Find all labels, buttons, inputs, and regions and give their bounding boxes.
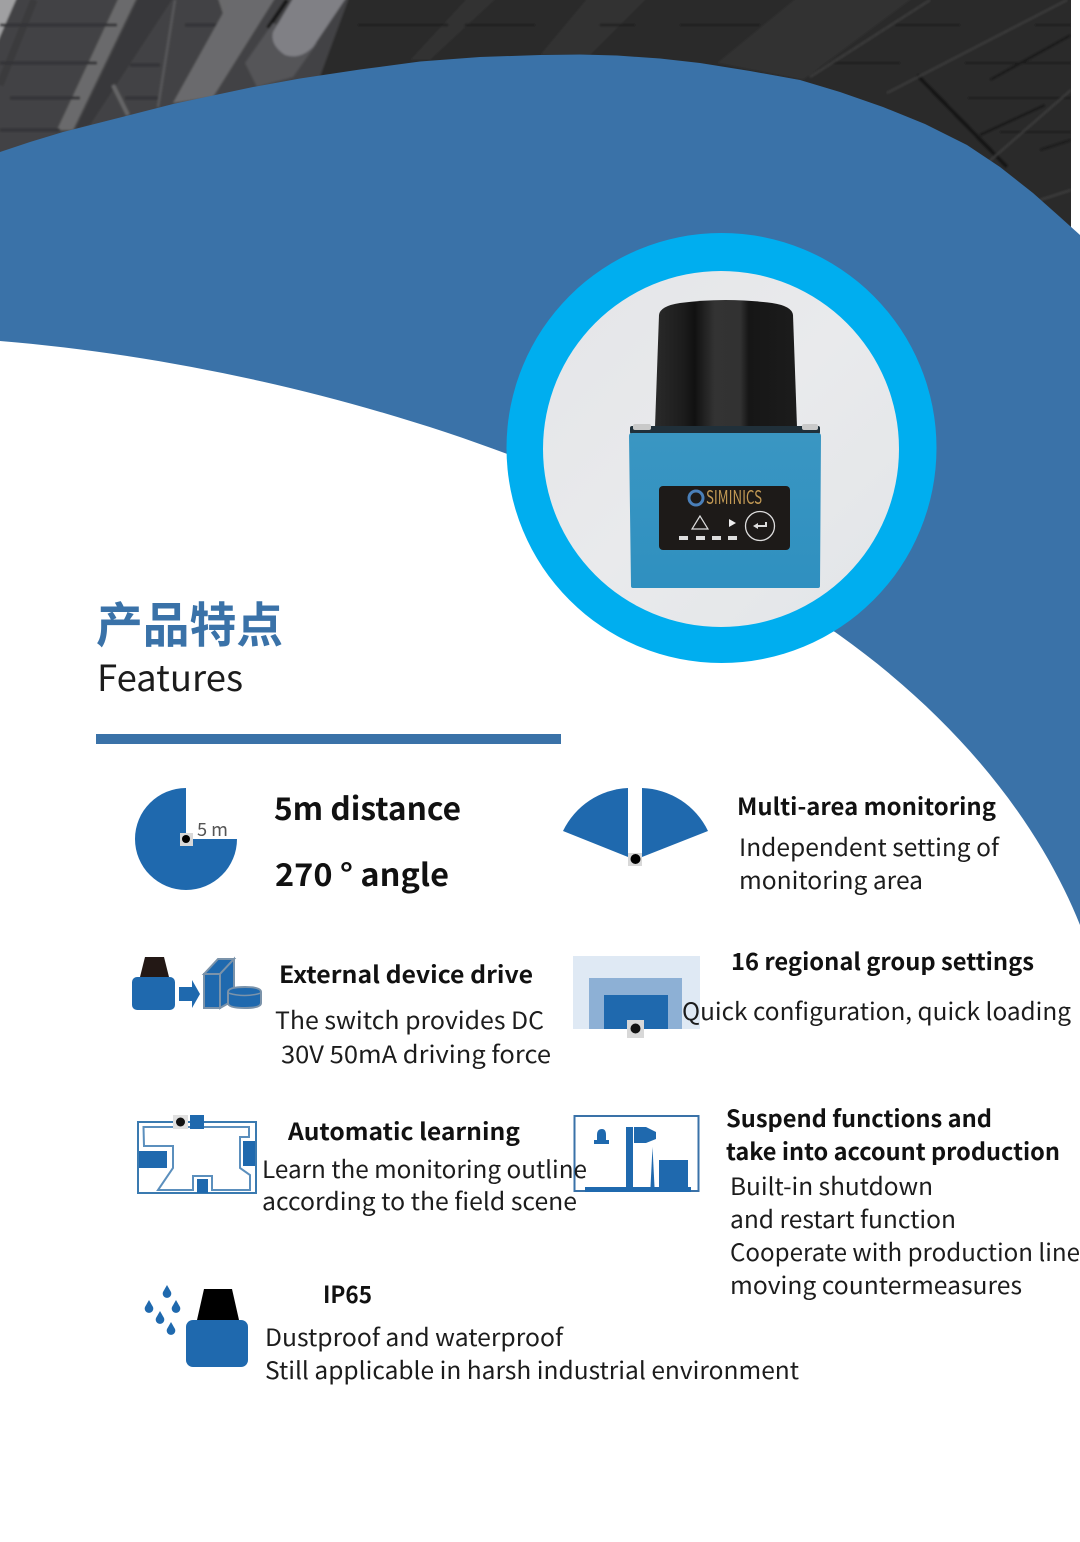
feature text: external device drive: The switch provides DC xyxy=(275,1001,544,1036)
feature text: IP65: Still applicable in harsh industrial environment xyxy=(265,1351,799,1386)
feature text: suspend functions: moving countermeasures xyxy=(730,1266,1022,1301)
feature text: regional group settings: Quick configuration, quick loading xyxy=(682,992,1071,1027)
feature text: automatic learning: Learn the monitoring outline xyxy=(262,1150,587,1185)
icon: external device drive xyxy=(132,957,261,1010)
feature text: IP65: IP65 xyxy=(323,1276,372,1310)
feature text: regional group settings: 16 regional group settings xyxy=(731,943,1034,977)
blue swoosh shape xyxy=(0,54,1080,925)
feature text: automatic learning xyxy=(262,1113,587,1217)
feature text: suspend functions xyxy=(726,1100,1080,1301)
feature text: distance and angle: 270 ° angle xyxy=(275,850,449,895)
feature text: IP65 xyxy=(265,1276,799,1386)
feature text: external device drive: External device drive xyxy=(279,956,533,990)
icon: regional groups xyxy=(573,956,700,1038)
icon: IP65 water drops and device xyxy=(145,1285,248,1367)
feature text: suspend functions: Suspend functions and xyxy=(726,1100,992,1134)
icon: 270 degree sector xyxy=(135,788,237,890)
icon: 270 degree sector: 5 m xyxy=(197,816,228,842)
feature text: suspend functions: and restart function xyxy=(730,1200,956,1235)
feature text: suspend functions: Built-in shutdown xyxy=(730,1167,933,1202)
feature text: IP65: Dustproof and waterproof xyxy=(265,1318,564,1353)
background photo: industrial ceiling xyxy=(0,0,1080,245)
feature text: automatic learning: Automatic learning xyxy=(287,1113,520,1147)
product: laser scanner xyxy=(629,300,821,588)
feature text: multi-area monitoring xyxy=(737,788,1000,896)
feature text: external device drive xyxy=(275,956,551,1070)
icon: suspend functions machine xyxy=(574,1116,698,1192)
product: laser scanner: SIMINICS xyxy=(706,483,762,510)
heading underline xyxy=(96,734,561,744)
feature text: suspend functions: Cooperate with production line xyxy=(730,1233,1080,1268)
feature text: multi-area monitoring: monitoring area xyxy=(739,861,923,896)
feature text: regional group settings xyxy=(682,943,1071,1027)
icon: automatic learning floor plan xyxy=(138,1115,256,1193)
feature text: multi-area monitoring: Multi-area monitoring xyxy=(737,788,996,822)
heading: Chinese title: 产品特点 xyxy=(96,600,283,653)
product circle xyxy=(506,233,936,663)
feature text: automatic learning: according to the field scene xyxy=(262,1182,577,1217)
feature text: external device drive: 30V 50mA driving force xyxy=(281,1035,551,1070)
feature text: distance and angle xyxy=(274,784,461,895)
heading: English title: Features xyxy=(97,650,243,702)
feature text: multi-area monitoring: Independent setting of xyxy=(739,828,1000,863)
feature text: distance and angle: 5m distance xyxy=(274,784,461,829)
feature text: suspend functions: take into account production xyxy=(726,1133,1060,1167)
icon: multi-area fan xyxy=(563,788,708,866)
